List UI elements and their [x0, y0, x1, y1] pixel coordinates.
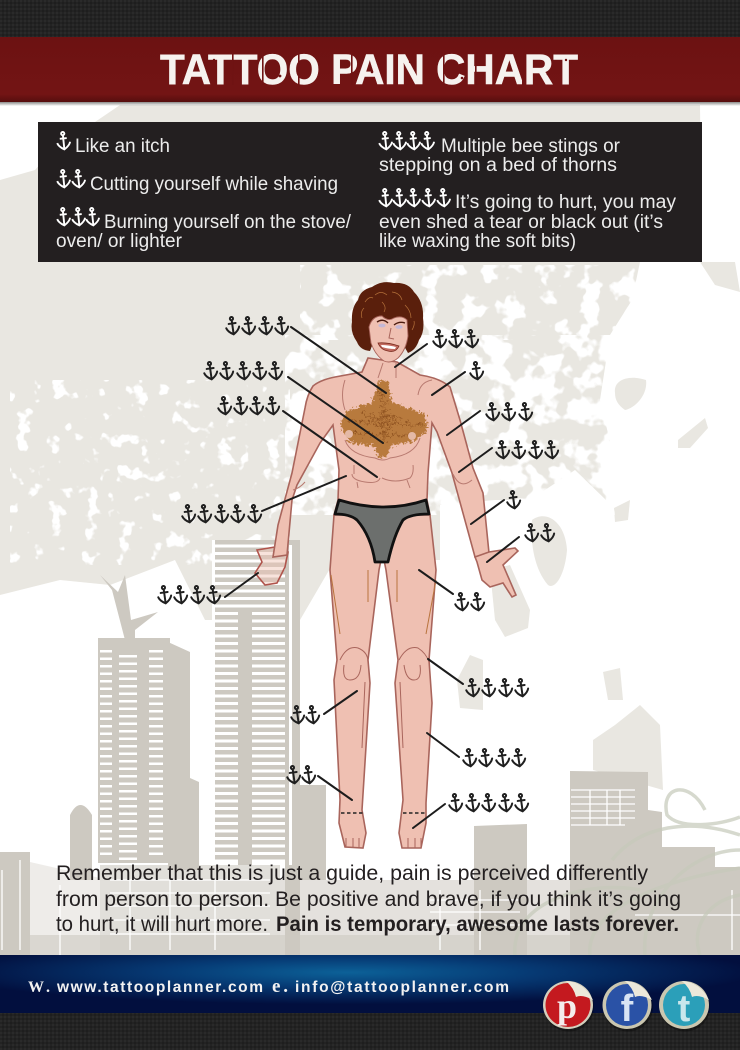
- closing message text block: [56, 862, 681, 936]
- closing message text block: Remember that this is just a guide, pain is perceived differently: [56, 862, 648, 885]
- arms and torso: [273, 358, 489, 557]
- leg details: [331, 570, 436, 848]
- rating: calf, 4 anchors: [462, 748, 526, 767]
- rating: thigh, 2 anchors: [454, 592, 485, 611]
- legend text 5: It’s going to hurt, you may: [455, 192, 677, 213]
- briefs: [335, 500, 429, 562]
- figure: man in briefs: [255, 282, 518, 848]
- legend text 4: Multiple bee stings or: [441, 136, 621, 157]
- rating: elbow, 4 anchors: [495, 440, 559, 459]
- decorative scroll flourish: [515, 790, 740, 955]
- rating: ankle left, 2 anchors: [286, 765, 316, 784]
- legend rating 5: [378, 188, 451, 207]
- closing message text block: from person to person. Be positive and brave, if you think it’s going: [56, 888, 681, 911]
- email contact: info@tattooplanner.com: [295, 979, 509, 996]
- legend text 1: Like an itch: [75, 136, 170, 157]
- title banner: [0, 37, 740, 106]
- city skyline buildings: [0, 540, 740, 960]
- bottom texture band: [0, 1013, 740, 1050]
- legend text 4: stepping on a bed of thorns: [379, 155, 617, 176]
- icon: facebook sticker: f: [621, 988, 634, 1030]
- left leg: [330, 515, 383, 848]
- legend text 3: oven/ or lighter: [56, 231, 183, 252]
- icon: facebook sticker: [602, 981, 653, 1032]
- legend text 3: Burning yourself on the stove/: [104, 212, 352, 233]
- rating: ribs, 4 anchors: [217, 396, 280, 415]
- email contact: e.: [272, 976, 288, 997]
- legend rating 3: [56, 207, 100, 226]
- rating: stomach, 5 anchors: [181, 504, 262, 523]
- chest and stomach lines: [293, 363, 472, 490]
- legend rating 1: [56, 131, 71, 150]
- title distress marks: [181, 52, 567, 85]
- panel: pain legend: [38, 122, 702, 262]
- legend text 4: [379, 136, 621, 176]
- legend rating 4: [378, 131, 435, 150]
- icon: pinterest sticker: p: [557, 986, 577, 1026]
- facial features: [377, 320, 405, 351]
- top texture band: [0, 0, 740, 38]
- hair strands: [361, 292, 414, 330]
- icon: pinterest sticker: [543, 981, 594, 1032]
- ratings: anchor icons placed around the figure: [157, 316, 559, 812]
- rating: palm, 4 anchors: [157, 585, 221, 604]
- left hand: [255, 547, 288, 585]
- legend text 5: [379, 192, 677, 252]
- face: [369, 316, 408, 362]
- rating: chest top, 4 anchors: [225, 316, 289, 335]
- rating: inner arm, 3 anchors: [485, 402, 533, 421]
- website contact: W.: [28, 979, 50, 996]
- right hand: [475, 548, 518, 597]
- closing message text block: to hurt, it will hurt more.: [56, 913, 268, 936]
- rating: sternum, 5 anchors: [203, 361, 283, 380]
- icon: twitter sticker: [659, 981, 710, 1032]
- legend text 5: even shed a tear or black out (it’s: [379, 212, 663, 233]
- legend rating 2: [56, 169, 86, 188]
- leader lines from ratings to body: [225, 327, 519, 828]
- rating: knee, 4 anchors: [465, 678, 529, 697]
- rating: shoulder, 1 anchor: [469, 361, 484, 380]
- rating: back of hand, 2 anchors: [524, 523, 555, 542]
- rating: forearm, 1 anchor: [506, 490, 521, 509]
- chest hair: [340, 380, 428, 457]
- legend text 5: like waxing the soft bits): [379, 231, 576, 252]
- title: TATTOO PAIN CHART: [160, 46, 578, 94]
- legend text 3: [56, 212, 352, 252]
- right leg: [383, 515, 436, 848]
- ankle marks: [341, 812, 427, 814]
- legend text 2: Cutting yourself while shaving: [90, 174, 338, 195]
- footer bar: [0, 955, 740, 1013]
- rating: neck, 3 anchors: [432, 329, 479, 348]
- hair: [352, 282, 424, 353]
- website contact: www.tattooplanner.com: [56, 979, 263, 996]
- closing message text block: Pain is temporary, awesome lasts forever.: [276, 913, 679, 936]
- rating: shin, 2 anchors: [290, 705, 320, 724]
- rating: foot, 5 anchors: [448, 793, 529, 812]
- icon: twitter sticker: t: [678, 988, 691, 1030]
